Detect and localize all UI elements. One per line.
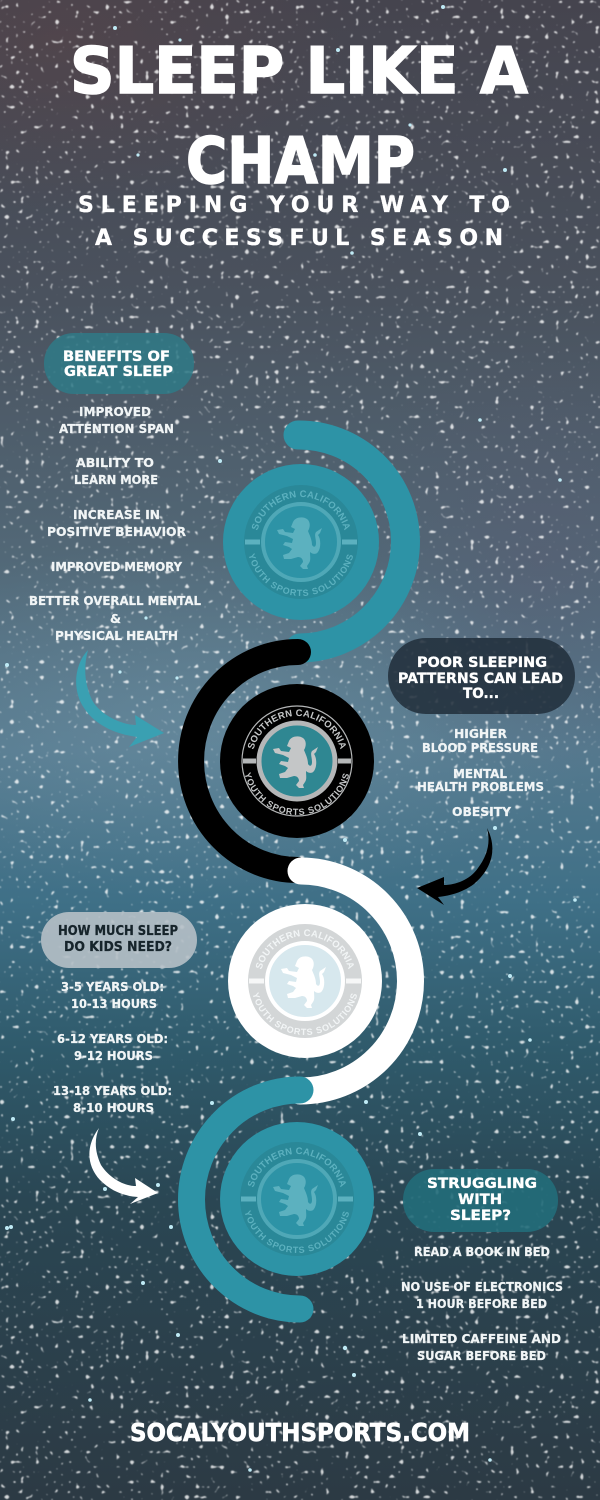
struggling list: LIMITED CAFFEINE AND bbox=[402, 1332, 561, 1346]
icon: black arc bbox=[191, 652, 298, 870]
logo: teal badge bbox=[223, 464, 379, 620]
panel: poor sleeping patterns bbox=[388, 638, 575, 905]
struggling list: SUGAR BEFORE BED bbox=[417, 1349, 546, 1363]
benefits list: POSITIVE BEHAVIOR bbox=[47, 525, 186, 539]
benefits list: INCREASE IN bbox=[73, 508, 160, 522]
logo: lower teal badge: SOUTHERN CALIFORNIA bbox=[248, 1147, 346, 1188]
benefits heading pill: BENEFITS OF bbox=[63, 349, 170, 365]
logo: black badge: SOUTHERN CALIFORNIA bbox=[248, 709, 346, 750]
footer url: SOCALYOUTHSPORTS.COM bbox=[130, 1418, 470, 1447]
subtitle: A SUCCESSFUL SEASON bbox=[95, 226, 503, 251]
benefits list: PHYSICAL HEALTH bbox=[55, 629, 178, 643]
panel: benefits of great sleep bbox=[29, 333, 201, 747]
poor sleep list: OBESITY bbox=[452, 805, 511, 819]
logo: white badge bbox=[228, 904, 382, 1058]
title: CHAMP bbox=[186, 125, 415, 199]
how much sleep heading pill bbox=[41, 912, 197, 968]
title bbox=[70, 35, 528, 199]
benefits list: ATTENTION SPAN bbox=[59, 422, 174, 436]
subtitle bbox=[78, 193, 510, 251]
struggling heading pill bbox=[403, 1169, 558, 1232]
logo: teal badge: SOUTHERN CALIFORNIA bbox=[252, 490, 350, 530]
struggling heading pill: WITH bbox=[458, 1192, 502, 1208]
icon: white arc bbox=[300, 871, 411, 1091]
icon: teal arc bbox=[298, 435, 405, 648]
logo: white badge: YOUTH SPORTS SOLUTIONS bbox=[253, 992, 357, 1035]
struggling list: READ A BOOK IN BED bbox=[414, 1245, 550, 1259]
benefits list: LEARN MORE bbox=[74, 473, 158, 487]
how much sleep list: 9-12 HOURS bbox=[74, 1049, 153, 1063]
logo: teal badge: YOUTH SPORTS SOLUTIONS bbox=[249, 553, 353, 596]
how much sleep list: 10-13 HOURS bbox=[71, 997, 157, 1011]
benefits list: BETTER OVERALL MENTAL bbox=[29, 594, 201, 608]
poor sleep list: MENTAL bbox=[453, 767, 507, 781]
arrow: white bbox=[89, 1128, 158, 1204]
benefits list: ABILITY TO bbox=[76, 456, 154, 470]
poor sleep list: HEALTH PROBLEMS bbox=[417, 780, 544, 794]
arrow: black bbox=[417, 828, 492, 905]
struggling list: 1 HOUR BEFORE BED bbox=[416, 1297, 547, 1311]
poor sleep heading pill bbox=[388, 638, 575, 714]
title: SLEEP LIKE A bbox=[70, 35, 528, 109]
poor sleep list: HIGHER bbox=[454, 727, 507, 741]
how much sleep list: 6-12 YEARS OLD: bbox=[57, 1032, 168, 1046]
poor sleep heading pill: TO... bbox=[463, 686, 499, 702]
logo: black badge: YOUTH SPORTS SOLUTIONS bbox=[245, 772, 349, 815]
poor sleep list bbox=[417, 727, 544, 819]
panel: struggling with sleep bbox=[401, 1169, 563, 1363]
logo: white badge: SOUTHERN CALIFORNIA bbox=[256, 929, 354, 969]
icon: lower teal arc bbox=[192, 1090, 300, 1309]
how much sleep heading pill: DO KIDS NEED? bbox=[64, 940, 172, 955]
struggling heading pill: STRUGGLING bbox=[427, 1176, 537, 1192]
how much sleep list: 3-5 YEARS OLD: bbox=[61, 980, 164, 994]
struggling list bbox=[401, 1245, 563, 1363]
poor sleep list: BLOOD PRESSURE bbox=[422, 741, 538, 755]
benefits list: IMPROVED MEMORY bbox=[51, 560, 182, 574]
how much sleep list bbox=[53, 980, 172, 1115]
benefits heading pill: GREAT SLEEP bbox=[64, 364, 173, 380]
logo: black badge bbox=[220, 684, 374, 838]
benefits heading pill bbox=[44, 333, 194, 394]
benefits list: & bbox=[110, 612, 121, 626]
panel: how much sleep bbox=[41, 912, 197, 1204]
subtitle: SLEEPING YOUR WAY TO bbox=[78, 193, 510, 218]
struggling list: NO USE OF ELECTRONICS bbox=[401, 1280, 563, 1294]
struggling heading pill: SLEEP? bbox=[450, 1208, 511, 1224]
poor sleep heading pill: POOR SLEEPING bbox=[417, 655, 547, 671]
logo: lower teal badge: YOUTH SPORTS SOLUTIONS bbox=[245, 1210, 349, 1253]
how much sleep list: 13-18 YEARS OLD: bbox=[53, 1084, 172, 1098]
logo: lower teal badge bbox=[220, 1122, 374, 1276]
benefits list bbox=[29, 405, 201, 643]
arrow: teal bbox=[76, 650, 164, 747]
poor sleep heading pill: PATTERNS CAN LEAD bbox=[398, 671, 563, 687]
benefits list: IMPROVED bbox=[79, 405, 151, 419]
how much sleep list: 8-10 HOURS bbox=[73, 1101, 154, 1115]
how much sleep heading pill: HOW MUCH SLEEP bbox=[58, 924, 178, 939]
